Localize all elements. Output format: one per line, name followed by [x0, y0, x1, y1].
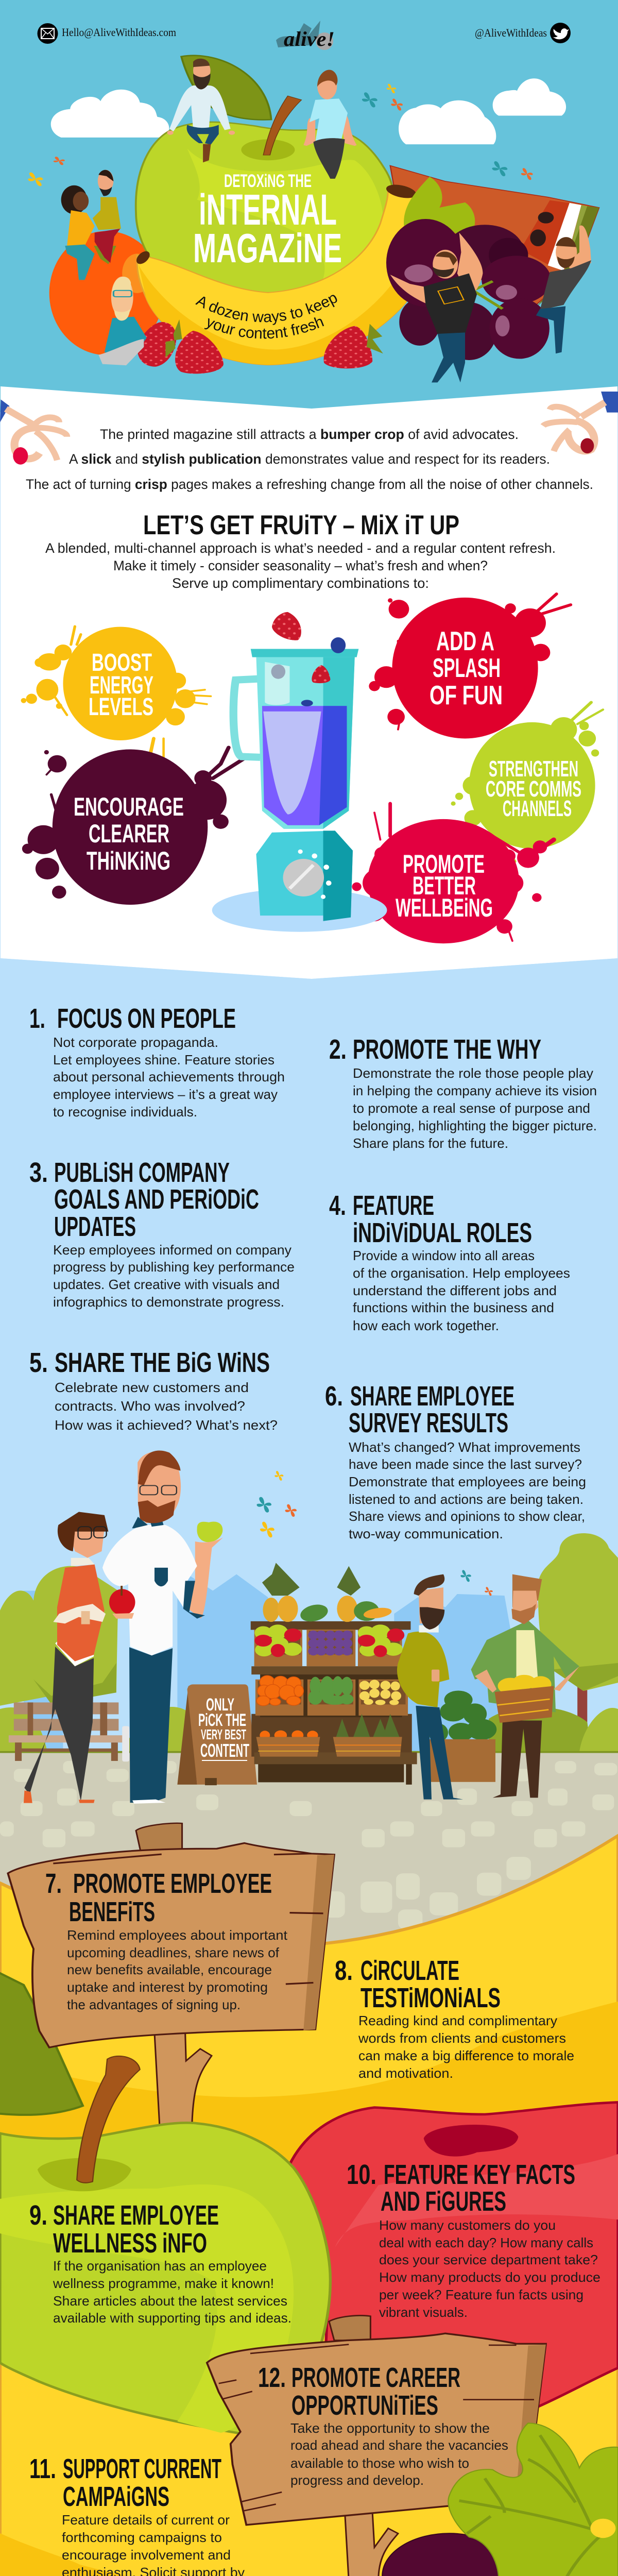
item 9: available with supporting tips and ideas. — [53, 2310, 291, 2326]
intro section illustrations — [0, 392, 618, 943]
banana shading upper — [0, 2002, 618, 2318]
splat label: boost energy levels: LEVELS — [89, 693, 153, 721]
ground — [0, 1753, 618, 2018]
leaf behind green apple — [0, 1971, 83, 2115]
splat: lime — [451, 702, 603, 861]
item 12: PROMOTE CAREER — [291, 2362, 460, 2393]
item 1: FOCUS ON PEOPLE — [57, 1003, 236, 1034]
bearded man with banana crate — [471, 1574, 579, 1798]
grapes and raspberries — [0, 2533, 618, 2576]
butterflies — [258, 1520, 494, 1597]
item 11: SUPPORT CURRENT — [63, 2453, 221, 2484]
item 12: available to those who wish to — [290, 2455, 469, 2471]
item 4: how each work together. — [353, 1318, 499, 1333]
splat label: promote better wellbeing: WELLBEiNG — [396, 893, 493, 922]
item 8: TESTiMONiALS — [360, 1982, 501, 2013]
watermelon — [390, 165, 599, 308]
city skyline — [24, 1568, 532, 1752]
item 12: road ahead and share the vacancies — [290, 2437, 508, 2453]
title: iNTERNAL — [199, 185, 337, 234]
grape leaves — [404, 177, 475, 236]
tall man with apples — [102, 1451, 223, 1804]
splat: red — [369, 594, 571, 738]
item 4: 4. — [329, 1190, 346, 1221]
splat: crimson — [352, 804, 554, 943]
title: MAGAZiNE — [193, 225, 342, 271]
item 9: 9. — [29, 2200, 47, 2231]
splat: yellow — [21, 626, 211, 762]
item 5: contracts. Who was involved? — [55, 1398, 245, 1414]
item 11: 11. — [29, 2453, 56, 2484]
item 7: Remind employees about important — [67, 1927, 288, 1943]
item 6 — [325, 1381, 586, 1541]
item 3: PUBLiSH COMPANY — [54, 1157, 230, 1188]
splat label: encourage clearer thinking: ENCOURAGE — [74, 792, 184, 821]
splat label: add a splash of fun: ADD A — [436, 626, 494, 656]
item 5: Celebrate new customers and — [55, 1380, 249, 1395]
logo: alive! — [284, 27, 335, 50]
grapes — [386, 219, 551, 360]
logo — [276, 21, 335, 50]
item 10: vibrant visuals. — [379, 2304, 468, 2320]
plum crate — [308, 1631, 352, 1655]
butterflies above market — [255, 1470, 298, 1518]
item 7: 7. — [45, 1868, 62, 1899]
sign text: only pick the very best content: PiCK THE — [198, 1710, 246, 1730]
item 11: encourage involvement and — [62, 2547, 231, 2563]
header: email: Hello@AliveWithIdeas.com — [62, 26, 176, 39]
item 2 — [329, 1034, 597, 1151]
strawberry leaves — [165, 319, 383, 358]
splat label: add a splash of fun: SPLASH — [433, 653, 501, 683]
apple leaf — [181, 56, 271, 120]
item 8: Reading kind and complimentary — [358, 2013, 557, 2028]
item 3: infographics to demonstrate progress. — [53, 1294, 284, 1310]
item 7: upcoming deadlines, share news of — [67, 1945, 280, 1960]
item 10: How many customers do you — [379, 2217, 556, 2233]
item 6: have been made since the last survey? — [349, 1456, 582, 1472]
trees — [0, 1533, 618, 1722]
green apple — [136, 122, 393, 293]
grass and hedges — [0, 1707, 618, 1753]
item 10: does your service department take? — [379, 2252, 598, 2267]
fruit section in crop coordinates — [0, 1971, 618, 2576]
intro text: The printed magazine still attracts a bumper crop of avid advocates. — [100, 427, 519, 442]
item 7: BENEFiTS — [69, 1896, 155, 1927]
lemon crate — [359, 1680, 401, 1705]
item 4: Provide a window into all areas — [353, 1248, 535, 1263]
blender — [212, 612, 387, 932]
banana shading lower — [0, 2533, 618, 2576]
blended text: Serve up complimentary combinations to: — [172, 575, 429, 591]
item 10: 10. — [347, 2159, 376, 2190]
item 5: SHARE THE BiG WiNS — [55, 1347, 270, 1378]
item 9: wellness programme, make it known! — [53, 2276, 274, 2291]
sign text: only pick the very best content: ONLY — [206, 1695, 234, 1715]
bearded man in olive — [397, 1574, 463, 1800]
blended text: Make it timely - consider seasonality – what’s fresh and when? — [113, 558, 488, 573]
apple crates — [254, 1624, 404, 1657]
item 12: OPPORTUNiTiES — [291, 2390, 438, 2421]
banana — [134, 182, 419, 365]
woman with coffee — [24, 1512, 108, 1803]
item 7 — [45, 1868, 288, 2012]
item 6: Demonstrate that employees are being — [349, 1474, 586, 1489]
splat label: add a splash of fun: OF FUN — [430, 681, 503, 710]
strawberries — [138, 322, 372, 374]
couple on orange — [61, 170, 121, 280]
sign text: only pick the very best content: VERY BEST — [201, 1726, 246, 1742]
item 7: the advantages of signing up. — [67, 1997, 241, 2012]
item 4 — [329, 1190, 570, 1333]
item 10: deal with each day? How many calls — [379, 2235, 593, 2250]
white intro section — [1, 386, 617, 979]
item 2: 2. — [329, 1034, 347, 1065]
header: twitter: @AliveWithIdeas — [475, 26, 547, 39]
splat: purple — [22, 748, 244, 905]
icon: left hand with raspberry — [0, 399, 67, 465]
signpost — [154, 2033, 212, 2126]
item 3: GOALS AND PERiODiC — [54, 1184, 259, 1215]
item 10 — [347, 2159, 600, 2320]
header: twitter — [475, 23, 571, 43]
intro text: The act of turning crisp pages makes a refreshing change from all the noise of other channels. — [26, 477, 593, 492]
item 8: words from clients and customers — [358, 2030, 566, 2046]
clouds — [51, 78, 566, 144]
orange crate — [256, 1675, 303, 1706]
signboard 7 — [8, 1823, 334, 2047]
item 1: Not corporate propaganda. — [53, 1035, 218, 1050]
signpost 12 lower — [345, 2513, 398, 2576]
pineapples and papaya — [262, 1563, 392, 1624]
heading: let's get fruity: LET’S GET FRUiTY – MiX iT UP — [143, 510, 459, 540]
marrow crate — [308, 1676, 353, 1705]
item 10: How many products do you produce — [379, 2269, 600, 2285]
man with glasses holding melon — [536, 226, 591, 353]
item 1: to recognise individuals. — [53, 1104, 197, 1120]
item 8: CiRCULATE — [360, 1955, 459, 1986]
item 10: AND FiGURES — [381, 2186, 506, 2217]
item 9: WELLNESS iNFO — [53, 2228, 207, 2259]
splat label: boost energy levels: BOOST — [92, 649, 152, 676]
hero illustration — [25, 56, 599, 382]
item 6: What’s changed? What improvements — [349, 1439, 580, 1455]
item 8: 8. — [335, 1955, 353, 1986]
item 7: new benefits available, encourage — [67, 1962, 272, 1977]
person on apple right — [303, 70, 357, 179]
item 3: progress by publishing key performance — [53, 1259, 295, 1275]
sign text: only pick the very best content: CONTENT — [200, 1740, 249, 1761]
item 3: 3. — [29, 1157, 48, 1188]
signboard 12 post — [329, 2315, 370, 2341]
item 5: How was it achieved? What’s next? — [55, 1417, 278, 1433]
item 6: two-way communication. — [349, 1526, 503, 1541]
item 6: listened to and actions are being taken. — [349, 1492, 583, 1507]
title: DETOXiNG THE — [224, 171, 312, 191]
item 1: Let employees shine. Feature stories — [53, 1052, 274, 1067]
item 1: about personal achievements through — [53, 1069, 285, 1084]
splat label: add a splash of fun — [430, 626, 503, 710]
man holding grape — [390, 233, 483, 382]
item 7: PROMOTE EMPLOYEE — [73, 1868, 272, 1899]
item 2: Share plans for the future. — [353, 1136, 508, 1151]
orange — [49, 231, 164, 355]
item 3: UPDATES — [54, 1211, 136, 1242]
market stall — [251, 1621, 417, 1785]
splat label: promote better wellbeing: PROMOTE — [403, 850, 485, 878]
item 4: iNDiViDUAL ROLES — [353, 1217, 532, 1248]
bench — [9, 1702, 124, 1761]
item 11: CAMPAiGNS — [63, 2481, 169, 2512]
seated blond person — [98, 277, 147, 365]
item 1 — [29, 1003, 285, 1120]
item 10: per week? Feature fun facts using — [379, 2287, 583, 2302]
grape bunch — [205, 2533, 618, 2576]
splat label: promote better wellbeing: BETTER — [413, 871, 476, 900]
item 12: progress and develop. — [290, 2472, 424, 2488]
background sky — [0, 0, 618, 412]
item 4: of the organisation. Help employees — [353, 1265, 570, 1281]
item 6: 6. — [325, 1381, 343, 1412]
splat label: boost energy levels: ENERGY — [90, 672, 153, 699]
header: email — [37, 23, 176, 44]
item 12 — [258, 2362, 508, 2488]
cobbles — [0, 1761, 617, 1929]
intro text: A slick and stylish publication demonstrates value and respect for its readers. — [69, 451, 550, 467]
item 4: understand the different jobs and — [353, 1283, 557, 1298]
item 6: SHARE EMPLOYEE — [350, 1381, 514, 1412]
intro text — [26, 427, 593, 492]
subtitle: your content fresh — [204, 317, 324, 339]
item 4: functions within the business and — [353, 1300, 554, 1315]
splat label: encourage clearer thinking — [74, 792, 184, 875]
subtitle — [195, 295, 337, 339]
sign text: only pick the very best content — [198, 1695, 249, 1761]
icon: right hand with cherry — [543, 392, 618, 453]
red apple — [289, 2103, 618, 2408]
apple stem — [263, 96, 301, 155]
signboard 12 — [207, 2333, 546, 2525]
item 2: in helping the company achieve its vision — [353, 1083, 597, 1098]
item 11: Feature details of current or — [62, 2512, 230, 2528]
item 4: FEATURE — [353, 1190, 434, 1221]
title — [193, 171, 342, 271]
item 3: updates. Get creative with visuals and — [53, 1277, 280, 1292]
item 8: and motivation. — [358, 2065, 453, 2081]
item 1: 1. — [29, 1003, 45, 1034]
item 11: forthcoming campaigns to — [62, 2530, 222, 2545]
person on apple leaf — [167, 59, 235, 162]
item 5 — [29, 1347, 278, 1433]
item 1: employee interviews – it’s a great way — [53, 1087, 278, 1102]
item 2: Demonstrate the role those people play — [353, 1065, 593, 1081]
splat label: encourage clearer thinking: CLEARER — [89, 819, 169, 848]
banana yellow section — [0, 1836, 618, 2576]
bottom crates — [256, 1714, 402, 1757]
item 12: Take the opportunity to show the — [290, 2420, 490, 2436]
item 11 — [29, 2453, 264, 2576]
market scene — [0, 1451, 618, 2018]
large grape leaf — [448, 2423, 618, 2576]
item 9: If the organisation has an employee — [53, 2258, 267, 2274]
item 12: 12. — [258, 2362, 286, 2393]
subtitle: A dozen ways to keep — [195, 295, 337, 325]
item 9: Share articles about the latest services — [53, 2293, 287, 2309]
item 7: uptake and interest by promoting — [67, 1979, 268, 1995]
butterflies — [25, 83, 535, 188]
item 3 — [29, 1157, 295, 1310]
green apple — [0, 2123, 330, 2433]
watermelons — [428, 1690, 496, 1782]
splat label: strengthen core comms channels — [486, 756, 581, 821]
item 5: 5. — [29, 1347, 48, 1378]
item 3: Keep employees informed on company — [53, 1242, 291, 1258]
light blue section — [0, 958, 618, 2576]
apple stem — [77, 2056, 140, 2183]
item 8 — [335, 1955, 574, 2081]
bin — [122, 1726, 129, 1761]
item 6: SURVEY RESULTS — [349, 1408, 508, 1438]
item 8: can make a big difference to morale — [358, 2048, 574, 2063]
splat label: boost energy levels — [89, 649, 153, 721]
item 9 — [29, 2200, 291, 2326]
chalk sign board — [177, 1684, 257, 1785]
item 9: SHARE EMPLOYEE — [53, 2200, 219, 2231]
item 2: to promote a real sense of purpose and — [353, 1100, 590, 1116]
blended text — [45, 540, 556, 591]
item 2: belonging, highlighting the bigger picture. — [353, 1118, 597, 1133]
blended text: A blended, multi-channel approach is what’s needed - and a regular content refresh. — [45, 540, 556, 556]
splat label: promote better wellbeing — [396, 850, 493, 922]
splat label: encourage clearer thinking: THiNKiNG — [87, 846, 170, 875]
item 6: Share views and opinions to show clear, — [349, 1509, 585, 1524]
